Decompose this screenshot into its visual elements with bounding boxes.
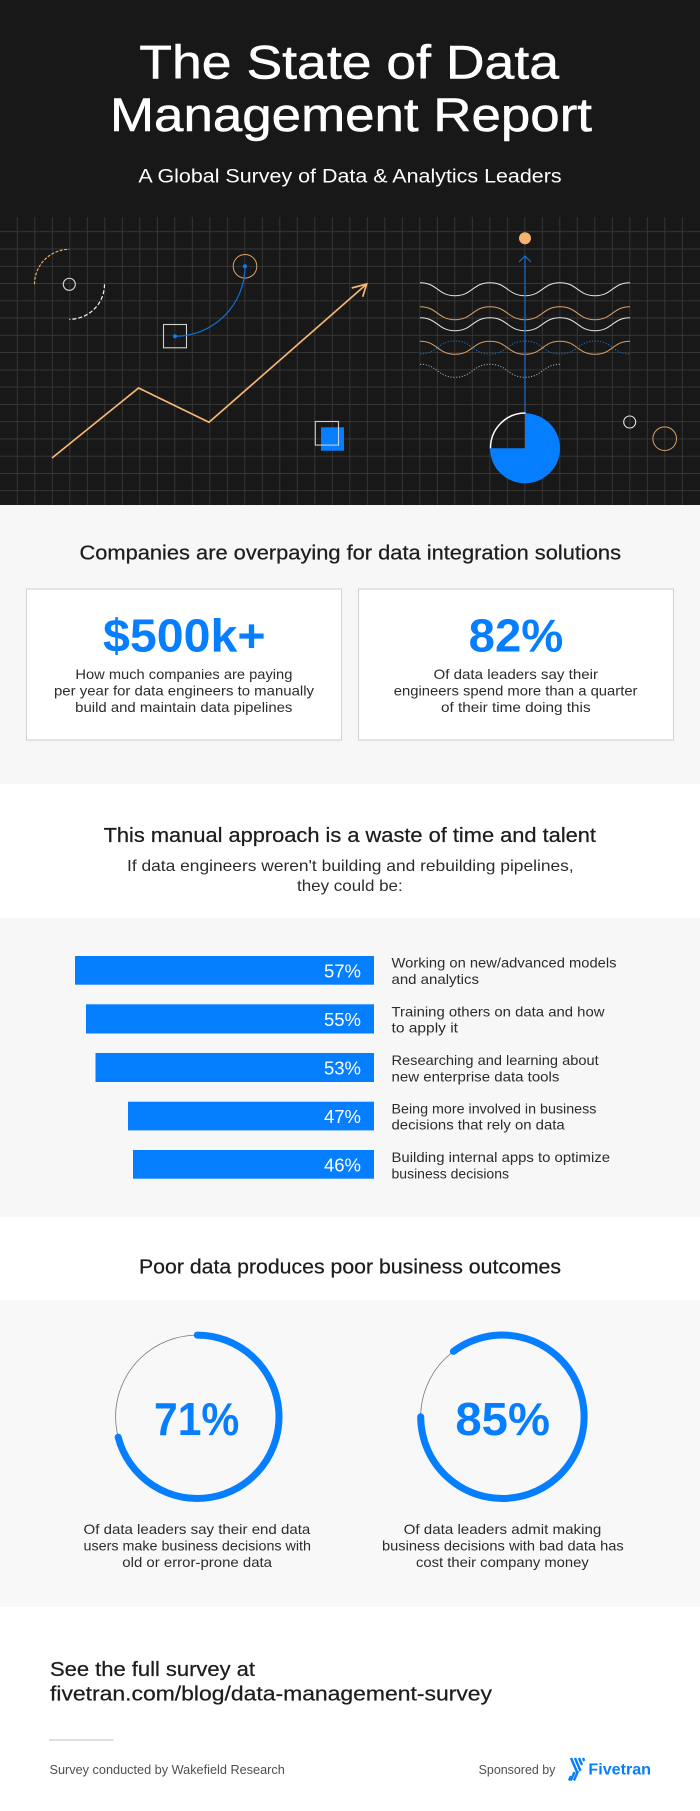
icon: Fivetran logo bbox=[569, 1758, 651, 1780]
bar: 57%: and analytics bbox=[392, 972, 479, 987]
icon: waves bbox=[420, 283, 630, 377]
bar: 55% bbox=[86, 1004, 605, 1036]
bar: 47%: decisions that rely on data bbox=[392, 1117, 565, 1132]
panel: bar chart section bbox=[0, 918, 700, 1217]
bar: 53%: 53% bbox=[324, 1057, 361, 1078]
heading: waste of time and talent: This manual approach is a waste of time and talent bbox=[104, 825, 596, 847]
bar: 55%: to apply it bbox=[392, 1021, 458, 1036]
bar: 57% bbox=[75, 956, 617, 987]
donut: 85%: Of data leaders admit making bbox=[404, 1522, 601, 1537]
donut: 71%: users make business decisions with bbox=[84, 1538, 311, 1554]
bar: 53%: new enterprise data tools bbox=[392, 1069, 559, 1084]
bar: 57%: Working on new/advanced models bbox=[392, 956, 617, 971]
donut: 71%: Of data leaders say their end data bbox=[84, 1522, 311, 1537]
card: $500k+: How much companies are paying bbox=[75, 667, 292, 682]
title bbox=[110, 35, 592, 141]
footer: sponsor: Sponsored by bbox=[479, 1763, 556, 1777]
card: $500k+: build and maintain data pipelines bbox=[75, 700, 293, 715]
icon: dashed arcs around small circle bbox=[34, 249, 104, 319]
icon: small outline circles bbox=[624, 416, 676, 451]
bar: 46%: business decisions bbox=[392, 1166, 509, 1181]
panel: donut section bbox=[0, 1300, 700, 1607]
bar: 47% bbox=[128, 1101, 596, 1132]
card: $500k+: per year for data engineers to manually bbox=[54, 683, 314, 698]
heading: overpaying: Companies are overpaying for data integration solutions bbox=[80, 542, 621, 564]
text block: section intro: they could be: bbox=[297, 878, 403, 895]
card: 82%: Of data leaders say their bbox=[434, 667, 598, 682]
card: $500k+ bbox=[26, 589, 342, 740]
icon: square connected to circle by blue curve bbox=[164, 254, 257, 348]
chart: rising orange line arrow bbox=[52, 284, 367, 458]
card: 82%: of their time doing this bbox=[441, 700, 591, 715]
text block: section intro: If data engineers weren't building and rebuilding pipelines, bbox=[127, 858, 574, 875]
title: The State of Data bbox=[139, 35, 560, 88]
footer: survey credit: Survey conducted by Wakefield Research bbox=[50, 1763, 285, 1777]
bar: 47%: 47% bbox=[324, 1106, 361, 1127]
icon: Fivetran logo: Fivetran bbox=[588, 1761, 651, 1778]
call to action: See the full survey at bbox=[50, 1659, 255, 1681]
donut: 85% bbox=[382, 1335, 624, 1570]
donut: 85%: business decisions with bad data has bbox=[382, 1538, 624, 1554]
bar: 57%: 57% bbox=[324, 960, 361, 981]
bar: 46%: Building internal apps to optimize bbox=[392, 1150, 610, 1165]
donut: 85%: cost their company money bbox=[416, 1555, 589, 1570]
bar: 55%: 55% bbox=[324, 1009, 361, 1030]
bar: 55%: Training others on data and how bbox=[392, 1005, 605, 1020]
text block: section intro bbox=[127, 858, 574, 895]
heading: poor data: Poor data produces poor business outcomes bbox=[139, 1257, 561, 1279]
donut: 71%: old or error-prone data bbox=[122, 1555, 272, 1570]
title: Management Report bbox=[110, 88, 592, 141]
donut: 85%: 85% bbox=[455, 1393, 550, 1445]
donut: 71%: 71% bbox=[154, 1393, 239, 1445]
card: $500k+: $500k+ bbox=[103, 610, 266, 662]
bar: 46%: 46% bbox=[324, 1155, 361, 1176]
donut: 71% bbox=[84, 1335, 311, 1570]
subtitle: A Global Survey of Data & Analytics Leaders bbox=[138, 167, 562, 188]
call to action: fivetran.com/blog/data-management-survey bbox=[50, 1684, 492, 1706]
icon: vertical blue arrow with orange dot bbox=[519, 232, 531, 414]
chart: three-quarter pie bbox=[490, 413, 560, 483]
call to action bbox=[50, 1659, 492, 1706]
bar: 53%: Researching and learning about bbox=[392, 1053, 599, 1068]
card: 82%: 82% bbox=[469, 610, 563, 662]
card: 82%: engineers spend more than a quarter bbox=[394, 683, 638, 698]
card: 82% bbox=[358, 589, 674, 740]
panel: overpaying section bbox=[0, 505, 700, 784]
bar: 46% bbox=[133, 1150, 610, 1181]
bar: 53% bbox=[96, 1053, 599, 1084]
bar: 47%: Being more involved in business bbox=[392, 1101, 596, 1116]
panel: dark hero header bbox=[0, 0, 700, 505]
icon: overlapping squares bbox=[315, 422, 344, 451]
